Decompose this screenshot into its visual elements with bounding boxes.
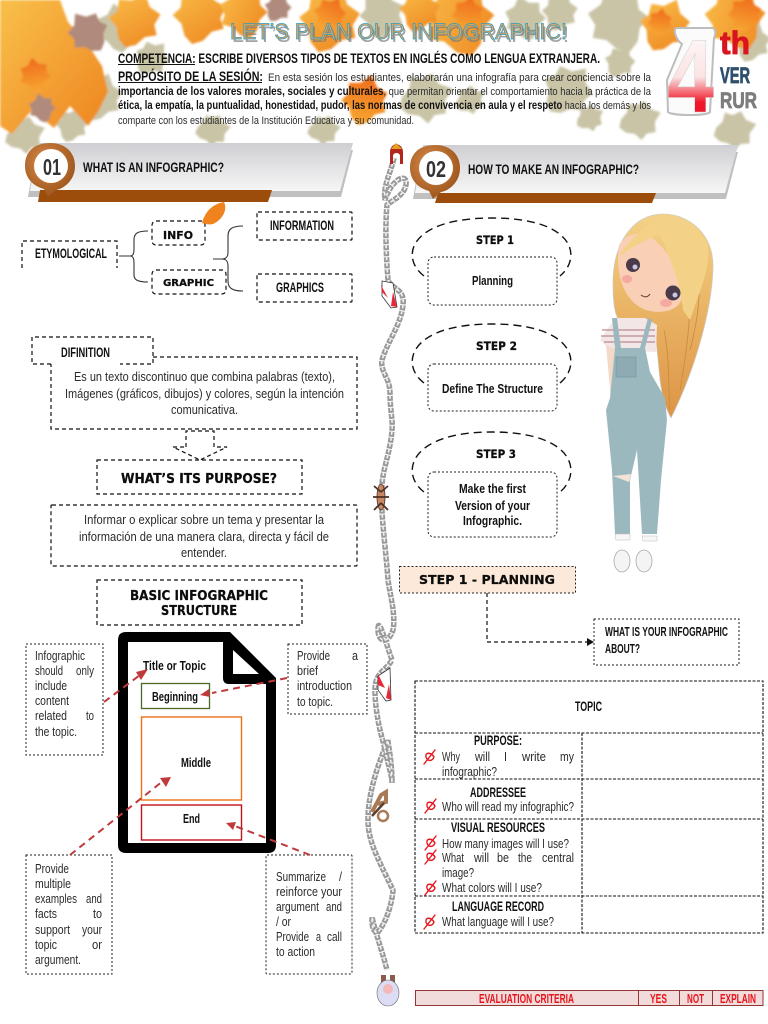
topic heading: TOPIC bbox=[575, 699, 602, 714]
callout: end note: Summarize bbox=[276, 870, 326, 884]
callout: beginning note: introduction bbox=[297, 679, 352, 693]
overalls bbox=[606, 318, 667, 534]
arrows: red dashed pointers bbox=[70, 669, 310, 855]
graphics box bbox=[257, 274, 352, 302]
panel: step 1: STEP 1 bbox=[476, 233, 514, 247]
header: competencia and propósito text: comparte con los estudiantes de la Institución Educativa y su comunidad. bbox=[118, 115, 414, 127]
information box bbox=[257, 212, 352, 240]
chain divider with charms bbox=[368, 143, 406, 1006]
row: visual resources: will bbox=[473, 851, 489, 865]
information box: INFORMATION bbox=[270, 217, 334, 233]
title or topic label: Title or Topic bbox=[143, 658, 206, 673]
callout: title note: the topic. bbox=[35, 725, 77, 739]
heading: step 1 planning: STEP 1 - PLANNING bbox=[419, 572, 555, 587]
callout: middle note: facts bbox=[35, 907, 57, 921]
callout: title note: related bbox=[35, 709, 67, 723]
row: visual resources: be bbox=[497, 851, 509, 865]
callout: title note bbox=[26, 644, 103, 755]
callout: end note: to action bbox=[276, 945, 315, 959]
section header 01 bbox=[25, 143, 353, 202]
definition tab: DIFINITION bbox=[61, 345, 110, 360]
icon: second bird charm bbox=[378, 668, 391, 701]
callout: end note bbox=[266, 855, 352, 974]
row: addressee: Who will read my infographic? bbox=[442, 800, 574, 814]
header: competencia and propósito text: importancia de los valores morales, sociales y culturales, que permitan orientar el comportamiento hacia la práctica de la bbox=[118, 86, 652, 98]
panel: step 2: Define The Structure bbox=[442, 381, 543, 396]
illustration: girl in overalls bbox=[600, 214, 713, 572]
document outline bbox=[118, 632, 276, 853]
callout: beginning note: to topic. bbox=[297, 695, 333, 709]
beginning box: Beginning bbox=[152, 689, 198, 704]
icon: number pin 02 bbox=[410, 145, 460, 199]
header: competencia and propósito text: ética, la empatía, la puntualidad, honestidad, pudor, las normas de convivencia en aula y el respeto hacia los demás y los bbox=[118, 100, 651, 112]
heading: how to make an infographic: HOW TO MAKE AN INFOGRAPHIC? bbox=[468, 161, 639, 177]
header: competencia and propósito text bbox=[118, 50, 652, 127]
callout: end note: argument bbox=[276, 900, 319, 914]
callout: end note: reinforce your bbox=[276, 885, 342, 899]
header: competencia and propósito text: PROPÓSITO DE LA SESIÓN: bbox=[118, 67, 263, 84]
panel: step 2 bbox=[412, 324, 571, 411]
row: purpose: infographic? bbox=[442, 765, 497, 779]
row: visual resources: central bbox=[542, 851, 574, 865]
callout: title note: should bbox=[35, 664, 63, 678]
panel: purpose text: información de una manera clara, directa y fácil de bbox=[79, 530, 329, 544]
row: addressee: ADDRESSEE bbox=[470, 784, 526, 800]
callout: end note: a bbox=[316, 930, 321, 944]
callout: beginning note: Provide bbox=[297, 649, 330, 663]
callout: title note: content bbox=[35, 694, 69, 708]
cuffs bbox=[615, 534, 657, 541]
panel: step 3: Make the first bbox=[459, 481, 527, 496]
panel: step 3 bbox=[412, 432, 571, 537]
icon: spider charm bbox=[373, 484, 389, 510]
row: purpose: I bbox=[504, 750, 507, 764]
header title: LET’S PLAN OUR INFOGRAPHIC! bbox=[230, 19, 567, 44]
row: language record: What language will I use? bbox=[442, 915, 554, 929]
callout: end note: call bbox=[327, 930, 342, 944]
callout: title note: include bbox=[35, 679, 67, 693]
middle box bbox=[142, 717, 242, 800]
section header 02 bbox=[410, 145, 738, 203]
panel: purpose text: entender. bbox=[181, 546, 227, 560]
definition text box bbox=[51, 357, 357, 429]
icon: number pin 01 bbox=[25, 143, 75, 197]
panel: step 3: Infographic. bbox=[463, 513, 522, 528]
table: evaluation criteria: NOT bbox=[687, 991, 704, 1006]
callout: middle note: examples bbox=[35, 892, 77, 906]
row: visual resources: image? bbox=[442, 866, 474, 880]
callout: middle note: to bbox=[93, 907, 102, 921]
eyes bbox=[626, 258, 640, 272]
callout: title note: only bbox=[76, 664, 95, 678]
callout: what is your infographic about: ABOUT? bbox=[605, 641, 640, 656]
icon: orange leaf bbox=[202, 202, 225, 224]
callout: middle note bbox=[26, 855, 112, 974]
front hair bbox=[619, 214, 708, 320]
row: language record: LANGUAGE RECORD bbox=[452, 898, 544, 914]
info box bbox=[152, 221, 205, 245]
icon: monkey charm bbox=[372, 792, 388, 821]
callout: middle note: and bbox=[86, 892, 102, 906]
row: visual resources bbox=[425, 819, 574, 895]
arm bbox=[606, 345, 618, 400]
callout: beginning note: a bbox=[352, 649, 358, 663]
panel: step 1: Planning bbox=[472, 273, 513, 288]
icon: red and white bird charm bbox=[381, 281, 397, 308]
badge: 4th grade: RUR bbox=[720, 88, 757, 113]
panel: purpose text bbox=[51, 505, 357, 566]
icon: crown charm bbox=[390, 143, 403, 164]
callout: what is your infographic about bbox=[594, 619, 739, 665]
row: addressee bbox=[425, 784, 574, 814]
header title: LET’S PLAN OUR INFOGRAPHIC! bbox=[232, 22, 569, 47]
table: topic planner bbox=[415, 681, 763, 933]
callout: middle note: multiple bbox=[35, 877, 71, 891]
etymological box bbox=[22, 241, 117, 268]
graphic box: GRAPHIC bbox=[163, 278, 214, 289]
document fold bbox=[233, 650, 259, 674]
callout: middle note: support bbox=[35, 923, 70, 937]
row: purpose bbox=[424, 732, 575, 779]
arrow: planning to question bbox=[487, 593, 594, 646]
badge: 4th grade: th bbox=[720, 25, 750, 61]
background: autumn leaves bbox=[0, 0, 768, 160]
callout: title note: to bbox=[86, 709, 94, 723]
arrow: down to purpose bbox=[173, 431, 227, 460]
table grid bbox=[415, 681, 763, 933]
callout: middle note: topic bbox=[35, 938, 57, 952]
icon: number pin 02: 02 bbox=[426, 156, 446, 182]
row: language record bbox=[424, 898, 554, 929]
callout: beginning note: brief bbox=[297, 664, 318, 678]
definition text box: Imágenes (gráficos, dibujos) y colores, según la intención bbox=[65, 387, 344, 401]
heading: basic infographic structure: STRUCTURE bbox=[161, 604, 237, 619]
panel: definition bbox=[32, 337, 357, 429]
table: evaluation criteria: YES bbox=[650, 991, 667, 1006]
shirt bbox=[600, 318, 657, 352]
panel: step 2: STEP 2 bbox=[476, 339, 517, 353]
end box: End bbox=[183, 811, 200, 826]
middle box: Middle bbox=[181, 755, 211, 770]
document page bbox=[128, 642, 266, 843]
graphic box bbox=[152, 270, 226, 294]
hair strands bbox=[664, 225, 699, 410]
row: visual resources: What colors will I use? bbox=[442, 881, 542, 895]
face bbox=[618, 234, 682, 312]
row: purpose: write bbox=[521, 750, 546, 764]
callout: end note: / or bbox=[276, 915, 291, 929]
shoes bbox=[614, 550, 630, 572]
icon: number pin 01: 01 bbox=[43, 154, 61, 180]
row: purpose: Why bbox=[442, 750, 461, 764]
heading: what's its purpose: WHAT’S ITS PURPOSE? bbox=[121, 472, 277, 487]
callout: end note: Provide bbox=[276, 930, 309, 944]
callout: end note: / bbox=[339, 870, 342, 884]
panel: step 1 bbox=[412, 218, 571, 305]
table: evaluation criteria bbox=[416, 990, 763, 1006]
definition tab bbox=[32, 337, 153, 364]
row: visual resources: What bbox=[442, 851, 464, 865]
row: visual resources: the bbox=[518, 851, 532, 865]
table: evaluation criteria: EVALUATION CRITERIA bbox=[479, 991, 574, 1006]
row: visual resources: How many images will I use? bbox=[442, 837, 569, 851]
heading: what's its purpose bbox=[97, 460, 302, 494]
callout: beginning note bbox=[288, 644, 367, 714]
panel: step 3: STEP 3 bbox=[476, 447, 516, 461]
chart: document structure diagram bbox=[118, 632, 276, 853]
graphics box: GRAPHICS bbox=[276, 279, 324, 295]
panel: etymological diagram bbox=[22, 202, 352, 302]
left brace bbox=[119, 231, 148, 282]
callout: middle note: argument. bbox=[35, 953, 81, 967]
callout: middle note: or bbox=[92, 938, 102, 952]
knee rip bbox=[613, 474, 631, 482]
badge: 4th grade: VER bbox=[720, 63, 750, 88]
row: purpose: my bbox=[560, 750, 575, 764]
badge: 4th grade: 4 bbox=[667, 19, 714, 135]
callout: middle note: your bbox=[82, 923, 102, 937]
panel: purpose text: Informar o explicar sobre un tema y presentar la bbox=[84, 513, 324, 527]
etymological box: ETYMOLOGICAL bbox=[35, 245, 107, 261]
heading: step 1 planning bbox=[400, 566, 576, 593]
callout: title note: Infographic bbox=[35, 649, 85, 663]
info box: INFO bbox=[163, 229, 193, 242]
hair bbox=[613, 214, 713, 418]
end box bbox=[142, 805, 242, 840]
heading: basic infographic structure bbox=[97, 580, 302, 625]
beginning box bbox=[142, 684, 210, 708]
row: purpose: PURPOSE: bbox=[474, 732, 522, 748]
definition text box: comunicativa. bbox=[171, 403, 238, 417]
mouth bbox=[641, 294, 650, 297]
callout: middle note: Provide bbox=[35, 862, 69, 876]
badge: 4th grade bbox=[667, 19, 757, 135]
panel: step 3: Version of your bbox=[455, 498, 530, 513]
row: purpose: will bbox=[474, 750, 490, 764]
header: competencia and propósito text: En esta sesión los estudiantes, elaborarán una infografía para crear conciencia sobre la bbox=[268, 72, 652, 84]
icon: sheep charm bbox=[377, 975, 399, 1006]
heading: basic infographic structure: BASIC INFOGRAPHIC bbox=[130, 589, 268, 604]
heading: what is an infographic: WHAT IS AN INFOGRAPHIC? bbox=[83, 159, 224, 175]
right brace bbox=[213, 226, 243, 291]
row: visual resources: VISUAL RESOURCES bbox=[451, 819, 545, 835]
overalls pocket bbox=[616, 357, 636, 377]
callout: end note: and bbox=[326, 900, 342, 914]
definition text box: Es un texto discontinuo que combina palabras (texto), bbox=[74, 370, 335, 384]
cheeks bbox=[622, 275, 632, 283]
